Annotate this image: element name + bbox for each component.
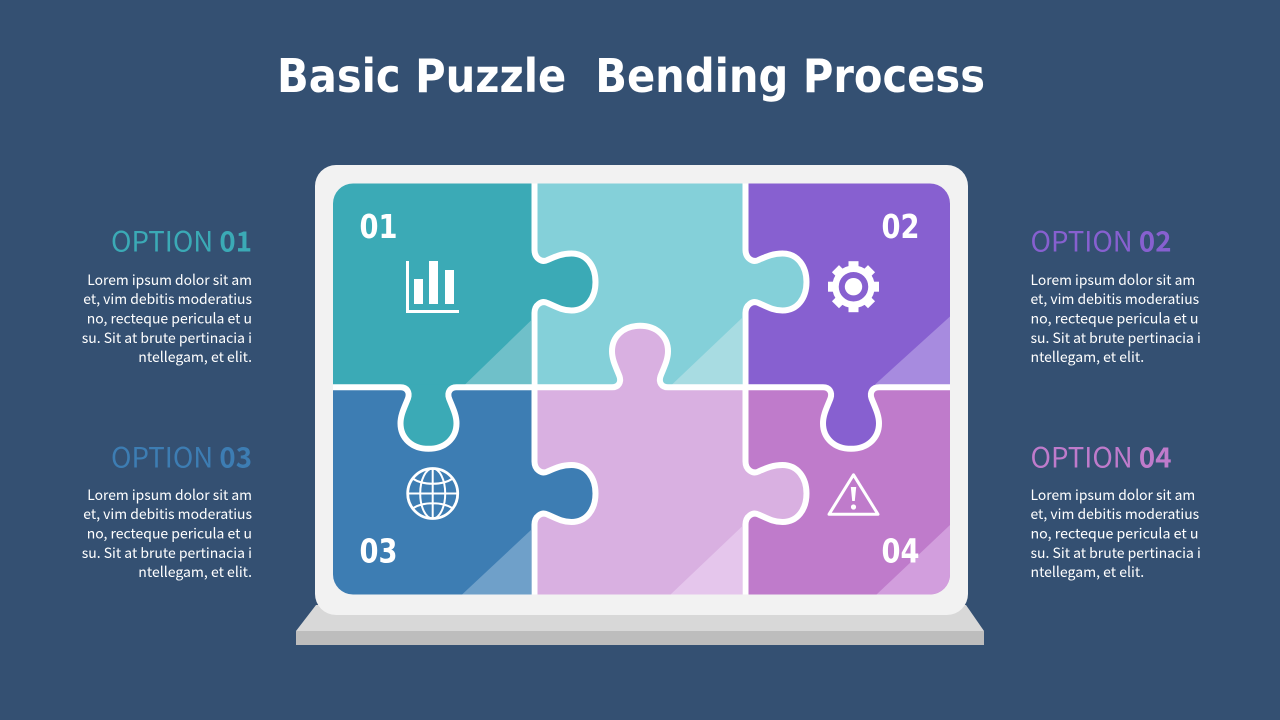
text block: option 01 body: no, recteque pericula et u [87, 308, 252, 328]
text block: option 01 body [82, 270, 252, 367]
heading: option 02: OPTION 02 [1030, 220, 1172, 260]
text block: option 01 body: su. Sit at brute pertinacia i [82, 328, 252, 348]
puzzle board [330, 182, 952, 596]
text block: option 01 body: ntellegam, et elit. [138, 347, 252, 367]
knob: teal into blue [404, 387, 454, 446]
white puzzle seams [330, 182, 952, 596]
text block: option 04 body: Lorem ipsum dolor sit am [1030, 485, 1195, 505]
panel: option 03 text [82, 436, 252, 582]
number 02: 02 [882, 207, 920, 246]
text block: option 04 body: no, recteque pericula et u [1030, 524, 1198, 544]
text block: option 01 body: et, vim debitis moderatius [83, 289, 252, 309]
text block: option 02 body: ntellegam, et elit. [1030, 347, 1144, 367]
icon: gear [828, 261, 879, 312]
text block: option 03 body: no, recteque pericula et u [87, 524, 252, 544]
text block: option 03 body: et, vim debitis moderatius [83, 504, 252, 524]
text block: option 02 body: et, vim debitis moderatius [1030, 289, 1200, 309]
number 03: 03 [360, 532, 398, 570]
heading: option 03: OPTION 03 [111, 436, 252, 476]
knob: purple into orchid [823, 384, 879, 449]
knob: teal into light teal [534, 256, 592, 308]
text block: option 04 body: ntellegam, et elit. [1030, 562, 1144, 582]
piece 2 light teal [534, 183, 746, 388]
title: Basic Puzzle Bending Process [277, 49, 985, 103]
piece 6 orchid [745, 387, 951, 596]
icon: warning triangle [829, 475, 878, 514]
text block: option 02 body: Lorem ipsum dolor sit am [1030, 270, 1195, 290]
heading: option 04: OPTION 04 [1030, 436, 1172, 476]
panel: option 02 text [1030, 220, 1201, 367]
text block: option 02 body: no, recteque pericula et u [1030, 308, 1198, 328]
text block: option 03 body: su. Sit at brute pertinacia i [82, 543, 252, 563]
piece 4 blue [333, 387, 535, 596]
knob: lilac into orchid [745, 468, 804, 519]
panel: option 04 text [1030, 436, 1201, 582]
text block: option 04 body: su. Sit at brute pertinacia i [1030, 543, 1201, 563]
knob: light teal into purple [745, 256, 804, 308]
heading: option 01: OPTION 01 [111, 220, 252, 260]
text block: option 04 body: et, vim debitis moderatius [1030, 504, 1200, 524]
icon: bar chart [406, 261, 459, 313]
piece 1 teal [333, 183, 535, 388]
frame panel [315, 165, 968, 615]
panel: option 01 text [82, 220, 252, 367]
number 01: 01 [360, 207, 398, 246]
text block: option 03 body: Lorem ipsum dolor sit am [87, 485, 252, 505]
knob: lilac into light teal [615, 328, 665, 387]
stand base [296, 605, 984, 645]
text block: option 03 body [82, 485, 252, 582]
text block: option 04 body [1030, 485, 1201, 582]
text block: option 01 body: Lorem ipsum dolor sit am [87, 270, 252, 290]
text block: option 02 body [1030, 270, 1201, 367]
knob: blue into lilac [534, 468, 592, 519]
text block: option 02 body: su. Sit at brute pertinacia i [1030, 328, 1201, 348]
icon: globe [408, 468, 458, 518]
text block: option 03 body: ntellegam, et elit. [138, 562, 252, 582]
number 04: 04 [882, 532, 920, 570]
piece 5 lilac [534, 387, 746, 596]
piece 3 purple [745, 183, 951, 388]
